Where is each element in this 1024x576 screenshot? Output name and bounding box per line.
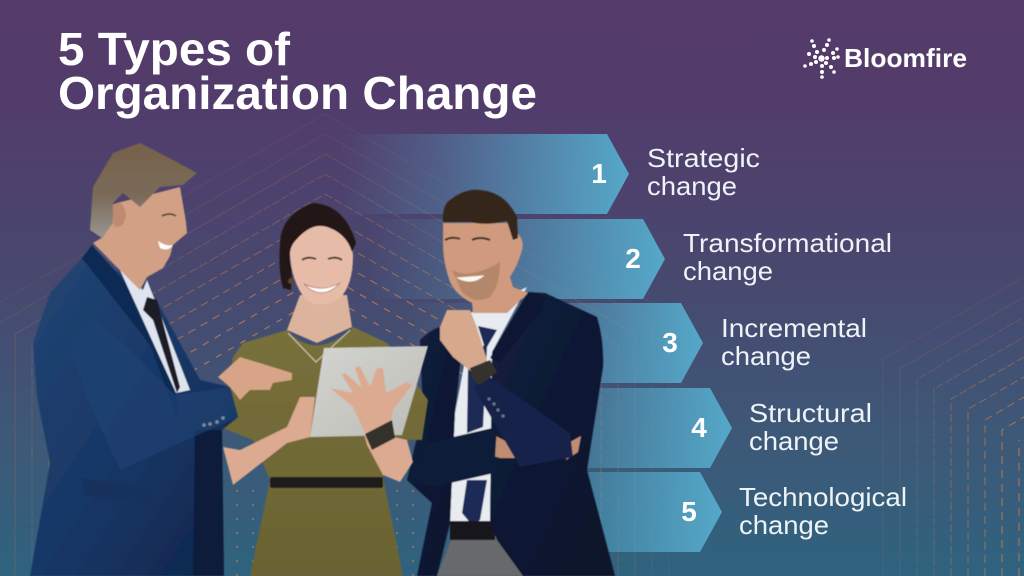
number 2: 2 (625, 243, 641, 274)
label: Technological change: change (739, 510, 829, 540)
number 4: 4 (691, 412, 707, 443)
label: Structural change: change (749, 426, 839, 456)
number 1: 1 (591, 158, 607, 189)
label: Strategic change: Strategic (647, 143, 760, 173)
label: Incremental change (721, 313, 867, 371)
label: Technological change: Technological (739, 482, 907, 512)
label: Strategic change: change (647, 171, 737, 201)
title: 5 Types of (58, 23, 291, 75)
logo: Bloomfire (803, 38, 967, 79)
belt (270, 477, 383, 488)
title (58, 23, 537, 119)
label: Transformational change: change (683, 256, 773, 286)
chevron 2: Transformational change (370, 219, 892, 299)
label: Structural change (749, 398, 872, 456)
number 5: 5 (681, 496, 697, 527)
label: Transformational change (683, 228, 892, 286)
tablet (310, 346, 428, 437)
photo: man on the left (30, 143, 292, 576)
number 3: 3 (662, 327, 678, 358)
chevron 5: Technological change (420, 472, 907, 552)
wordmark: Bloomfire (844, 43, 967, 73)
label: Structural change: Structural (749, 398, 872, 428)
photo: man on the right (407, 190, 615, 576)
icon: bloom (803, 38, 840, 79)
title: Organization Change (58, 67, 537, 119)
chevron 4: Structural change (430, 388, 872, 468)
label: Transformational change: Transformational (683, 228, 892, 258)
label: Technological change (739, 482, 907, 540)
chevron 1: Strategic change (340, 134, 760, 214)
chevron 3: Incremental change (400, 303, 867, 383)
photo: woman with tablet (220, 203, 428, 576)
label: Incremental change: Incremental (721, 313, 867, 343)
label: Strategic change (647, 143, 760, 201)
label: Incremental change: change (721, 341, 811, 371)
